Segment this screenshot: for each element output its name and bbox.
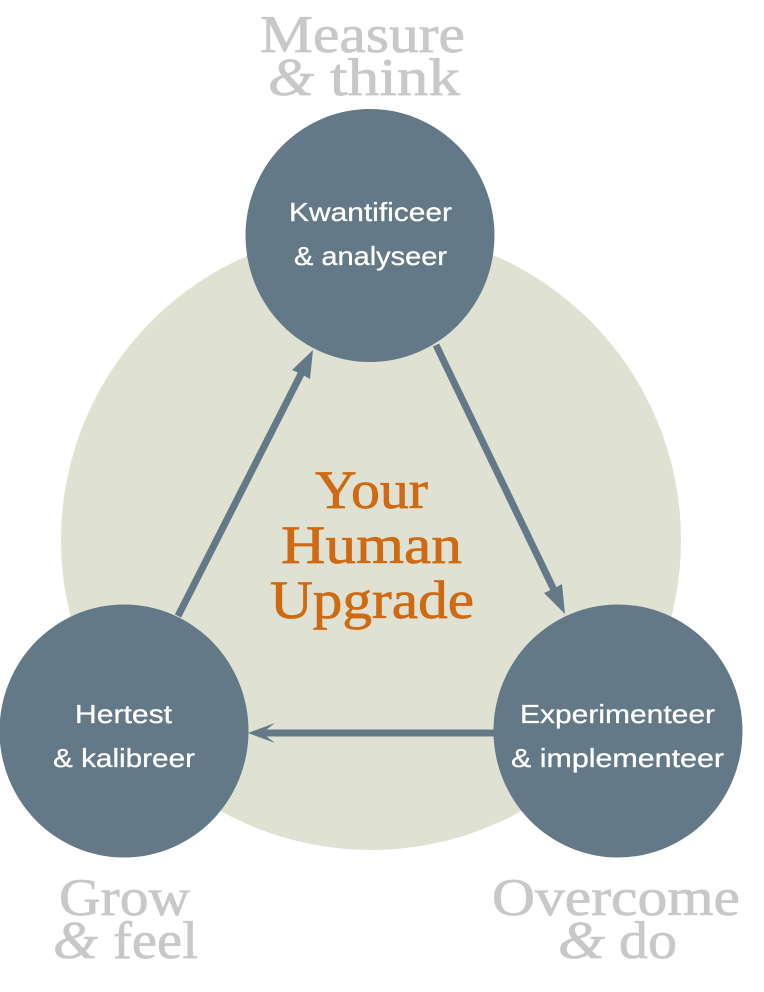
heading: Grow & feel: Grow xyxy=(59,869,191,927)
center title xyxy=(270,460,474,630)
heading: Measure & think: think xyxy=(330,49,461,107)
arrow: measure to overcome xyxy=(436,345,565,614)
heading: Overcome & do xyxy=(492,869,740,970)
node label: Kwantificeer: Kwantificeer xyxy=(289,197,452,227)
background circle xyxy=(61,230,681,850)
heading: Grow & feel: feel xyxy=(113,912,198,970)
heading: Grow & feel xyxy=(53,869,198,970)
arrow: overcome to grow xyxy=(248,723,496,743)
node label: implementeer: & implementeer xyxy=(511,743,724,773)
heading: Overcome & do: & xyxy=(558,912,606,970)
node label: Experimenteer: Experimenteer xyxy=(520,699,715,729)
node label: analyseer: & analyseer xyxy=(294,241,447,271)
heading: Grow & feel: & xyxy=(53,912,99,970)
node label: Hertest: Hertest xyxy=(75,699,173,729)
arrow: grow to measure xyxy=(178,350,313,616)
heading: Measure & think xyxy=(260,6,465,107)
center title: Human xyxy=(281,515,462,575)
heading: Measure & think: & xyxy=(268,49,315,107)
heading: Overcome & do: do xyxy=(619,912,677,970)
heading: Overcome & do: Overcome xyxy=(492,869,740,927)
node: top circle xyxy=(246,109,494,362)
heading: Measure & think: Measure xyxy=(260,6,465,64)
center title: Upgrade xyxy=(270,570,474,630)
center title: Your xyxy=(315,460,428,520)
node: left circle xyxy=(0,604,248,858)
node: right circle xyxy=(494,604,742,858)
node label: kalibreer: & kalibreer xyxy=(53,743,195,773)
